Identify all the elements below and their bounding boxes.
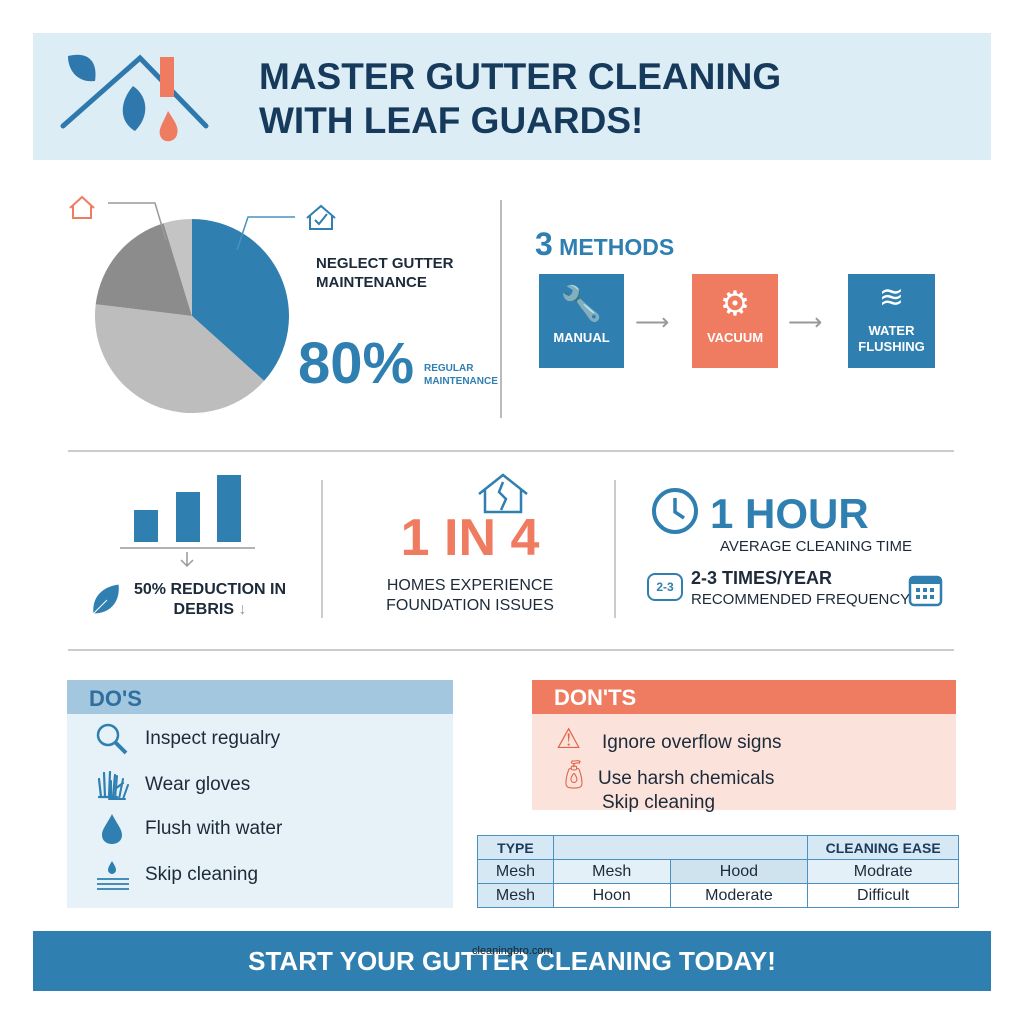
panel: do's (67, 680, 453, 908)
panel: debris reduction (93, 475, 286, 618)
item: skip: Skip cleaning (145, 864, 258, 885)
item: skip (97, 861, 258, 890)
method: vacuum: VACUUM (707, 330, 763, 345)
table: guard types: Mesh (592, 862, 631, 880)
item: inspect (96, 724, 280, 754)
table: guard types: Hoon (593, 886, 631, 904)
method: water flushing: FLUSHING (858, 339, 925, 354)
icon: 2-3 badge: 2-3 (656, 580, 674, 594)
arrow: ⟶ (635, 309, 669, 336)
text: neglect: NEGLECT GUTTER (316, 255, 454, 272)
panel: time and frequency (647, 488, 942, 608)
icon: clock (652, 488, 698, 534)
method: water flushing: WATER (868, 323, 914, 338)
item: skip: Skip cleaning (602, 792, 715, 813)
text: 50% REDUCTION IN DEBRIS ↓ (134, 581, 286, 618)
stat: 1 hour: 1 HOUR (710, 490, 869, 537)
item: overflow: Ignore overflow signs (602, 732, 782, 753)
table: guard types: TYPE (497, 840, 534, 856)
method: vacuum (692, 274, 778, 368)
arrow: ⟶ (788, 309, 822, 336)
header banner (33, 33, 991, 160)
text: frequency: 2-3 TIMES/YEAR (691, 568, 832, 588)
panel: time and frequency: AVERAGE CLEANING TIME (720, 538, 912, 555)
table: guard types: CLEANING EASE (826, 840, 941, 856)
text: HOMES EXPERIENCE (387, 577, 553, 594)
icon: leaf (93, 584, 119, 614)
item: overflow: ⚠︎ (556, 723, 581, 754)
title: WITH LEAF GUARDS! (259, 100, 643, 141)
item: inspect: Inspect regualry (145, 728, 280, 749)
panel: don'ts (532, 680, 956, 810)
text: neglect (316, 255, 454, 291)
text (386, 577, 554, 614)
icon: cracked house (478, 474, 528, 514)
stat: 80%: 80% (298, 331, 414, 396)
method: manual (539, 274, 624, 368)
method: manual: MANUAL (553, 330, 610, 345)
method: water flushing: ≋ (879, 281, 904, 314)
watermark: cleaningbro.com (472, 945, 553, 957)
text: frequency: RECOMMENDED FREQUENCY (691, 591, 910, 608)
heading (532, 680, 956, 714)
panel: 3 methods (535, 226, 935, 368)
item: gloves (98, 770, 250, 800)
footer banner (33, 931, 991, 991)
text: regular maintenance: REGULAR (424, 363, 473, 374)
item: flush: Flush with water (145, 818, 282, 839)
panel: 1 in 4 (386, 474, 554, 614)
table: guard types: Hood (720, 862, 758, 880)
text: frequency (691, 568, 910, 608)
method: vacuum: ⚙ (720, 285, 750, 323)
text: FOUNDATION ISSUES (386, 597, 554, 614)
icon: calendar (908, 576, 942, 606)
table: guard types (477, 835, 959, 908)
item: chemicals: Use harsh chemicals (598, 768, 774, 789)
heading (67, 680, 453, 714)
heading: DON'TS (554, 685, 636, 710)
item: gloves: Wear gloves (145, 774, 250, 795)
footer banner: START YOUR GUTTER CLEANING TODAY! (248, 946, 776, 976)
stat: 1 IN 4 (401, 509, 539, 567)
panel: pie chart (69, 196, 498, 413)
icon: 2-3 badge (647, 573, 683, 601)
item: overflow (556, 723, 782, 754)
method: manual: 🔧 (560, 285, 603, 323)
text: regular maintenance (424, 363, 498, 387)
item: chemicals: 🧴︎ (556, 759, 592, 790)
title (259, 56, 781, 141)
table: guard types: Difficult (857, 886, 909, 904)
icon: house with leaves (60, 54, 208, 142)
table: guard types: Moderate (705, 886, 773, 904)
text: neglect: MAINTENANCE (316, 274, 427, 291)
item: chemicals (556, 759, 774, 790)
table: guard types: Mesh (496, 862, 535, 880)
table: guard types: Mesh (496, 886, 535, 904)
item: flush (102, 814, 282, 844)
title: MASTER GUTTER CLEANING (259, 56, 781, 97)
text: regular maintenance: MAINTENANCE (424, 376, 498, 387)
heading: DO'S (89, 686, 142, 711)
table: guard types: Modrate (854, 862, 912, 880)
heading: 3 METHODS (535, 226, 674, 262)
method: water flushing (848, 274, 935, 368)
